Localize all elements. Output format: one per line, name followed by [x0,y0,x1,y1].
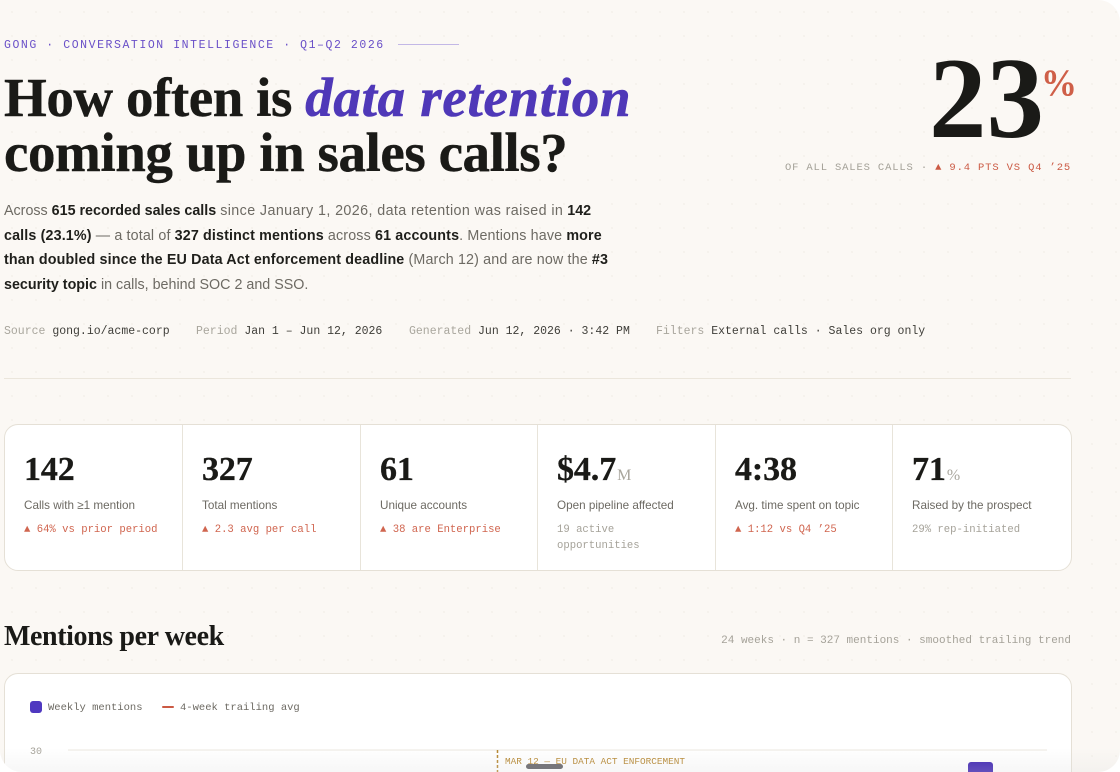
metadata: filters: Filters External calls · Sales org only [656,325,925,338]
section heading: Mentions per week [4,621,224,652]
title: How often is data retention [4,67,631,128]
stat: total mentions: 327 [202,451,253,488]
stat: avg time: 4:38 [735,451,797,488]
stat: open pipeline: opportunities [557,540,640,552]
bar chart [30,701,1047,772]
stat: unique accounts: 61 [380,451,414,488]
intro paragraph: than doubled since the EU Data Act enforcement deadline (March 12) and are now the #3 [4,252,608,268]
panel: mentions per week chart [4,673,1072,772]
intro paragraph: calls (23.1%) — a total of 327 distinct mentions across 61 accounts. Mentions have more [4,228,602,244]
headline stat caption: OF ALL SALES CALLS · ▲ 9.4 PTS VS Q4 ’25 [785,162,1071,174]
stat: open pipeline: $4.7M [557,451,631,488]
event marker: EU Data Act: MAR 12 — EU DATA ACT ENFORCEMENT [505,756,685,767]
stat: raised by prospect: Raised by the prospect [912,499,1032,512]
intro paragraph: Across 615 recorded sales calls since January 1, 2026, data retention was raised in 142 [4,203,591,219]
title [4,67,631,184]
stat: raised by prospect: 29% rep-initiated [912,524,1020,536]
stat: calls with mention [5,425,183,570]
metadata: generated: Generated Jun 12, 2026 · 3:42 PM [409,325,630,338]
stat: unique accounts [361,425,538,570]
stat: calls with mention: 142 [24,451,75,488]
stat: open pipeline: 19 active [557,524,614,536]
stat: open pipeline [538,425,716,570]
bar: tallest week [968,762,993,772]
eyebrow label: GONG · CONVERSATION INTELLIGENCE · Q1–Q2 2026 [4,39,385,52]
stat: calls with mention: ▲ 64% vs prior period [24,524,158,536]
stat: open pipeline: Open pipeline affected [557,499,674,512]
stat: unique accounts: ▲ 38 are Enterprise [380,524,501,536]
stat: total mentions: ▲ 2.3 avg per call [202,524,316,536]
y axis label 30: 30 [30,747,42,758]
stat: calls with mention: Calls with ≥1 mention [24,499,135,512]
stat: raised by prospect [912,451,1032,536]
stat: unique accounts: Unique accounts [380,499,467,512]
metadata: source: Source gong.io/acme-corp [4,325,170,338]
stat: avg time: ▲ 1:12 vs Q4 ’25 [735,524,837,536]
legend: trailing avg: 4-week trailing avg [180,702,300,714]
title: coming up in sales calls? [4,122,567,183]
stat: total mentions: Total mentions [202,499,277,512]
stat: avg time: Avg. time spent on topic [735,499,860,512]
intro paragraph: security topic in calls, behind SOC 2 and SSO. [4,277,308,293]
headline stat: 23%: 23 [929,35,1044,162]
metadata: period: Period Jan 1 – Jun 12, 2026 [196,325,382,338]
section subtitle: 24 weeks · n = 327 mentions · smoothed trailing trend [721,635,1071,647]
stat: raised by prospect: 71% [912,451,960,488]
legend: weekly mentions: Weekly mentions [48,702,143,714]
stat: avg time [716,425,893,570]
percent sign: % [1041,62,1077,104]
intro paragraph [4,203,608,293]
stat: total mentions [183,425,361,570]
panel: KPI stats [4,424,1072,571]
